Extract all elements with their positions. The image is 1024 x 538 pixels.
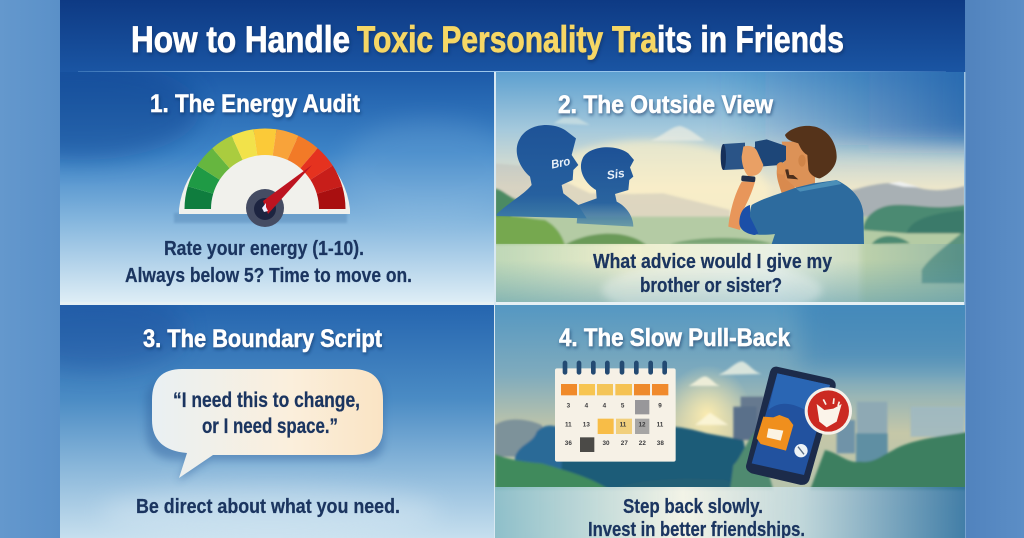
caption: be direct: Be direct about what you need.: [136, 496, 400, 518]
panel dividers: [60, 302, 965, 305]
caption: rate your energy: Always below 5? Time to move on.: [125, 265, 412, 287]
callout: speech bubble: [146, 369, 384, 482]
icon: phone: [746, 367, 852, 485]
icon: calendar: 38: [657, 440, 664, 447]
heading: the energy audit: 1. The Energy Audit: [150, 90, 361, 118]
scenery: clouds, hills and trees: [495, 117, 965, 307]
caption: rate your energy: [125, 238, 412, 287]
caption: step back slowly: [588, 496, 805, 538]
panel: 3 boundary script: [60, 305, 494, 538]
caption band: [496, 244, 964, 302]
icon: calendar: 9: [658, 403, 662, 410]
panel: 2 outside view: [496, 72, 964, 302]
callout: speech bubble: “I need this to change,: [173, 389, 360, 412]
icon: calendar: 36: [565, 440, 572, 447]
title: its in Friends: [657, 19, 844, 60]
caption: rate your energy: Rate your energy (1-10).: [164, 238, 364, 260]
title: How to Handle: [131, 19, 350, 60]
caption band: [495, 487, 965, 538]
caption: what advice: brother or sister?: [640, 275, 782, 297]
chart: energy gauge: [174, 128, 350, 227]
callout: speech bubble: or I need space.”: [202, 415, 338, 438]
icon: man with binoculars: [721, 126, 864, 244]
icon: calendar: 12: [638, 421, 646, 428]
title: [131, 19, 844, 60]
icon: bro and sis silhouettes: [497, 125, 634, 227]
icon: calendar: 11: [565, 421, 572, 428]
icon: calendar: 30: [602, 440, 610, 447]
icon: calendar: [555, 361, 676, 462]
icon: calendar: 4: [603, 403, 607, 410]
icon: calendar: 13: [583, 421, 590, 428]
icon: calendar: 3: [567, 403, 571, 410]
heading: the slow pull-back: 4. The Slow Pull-Back: [559, 324, 790, 352]
icon: calendar: 4: [585, 403, 589, 410]
heading: the boundary script: 3. The Boundary Script: [143, 325, 383, 353]
icon: calendar: 27: [621, 440, 628, 447]
panel: 1 energy audit: [60, 72, 494, 302]
caption: what advice: [592, 252, 832, 292]
heading: the outside view: 2. The Outside View: [558, 91, 774, 119]
title: Tra: [612, 19, 657, 60]
icon: calendar: 5: [621, 403, 625, 410]
panel: 4 slow pull-back: [495, 305, 965, 538]
caption: step back slowly: Step back slowly.: [623, 496, 763, 518]
caption: what advice: What advice would I give my: [593, 251, 833, 273]
icon: bro and sis silhouettes: Bro: [550, 154, 572, 172]
title: Toxic Personality: [357, 19, 603, 60]
scenery: clouds, city and trees: [495, 361, 970, 490]
header band: [60, 0, 965, 72]
icon: calendar: 11: [657, 421, 664, 428]
icon: calendar: 11: [620, 421, 627, 428]
icon: calendar: 22: [639, 440, 646, 447]
icon: bro and sis silhouettes: Sis: [606, 166, 626, 182]
